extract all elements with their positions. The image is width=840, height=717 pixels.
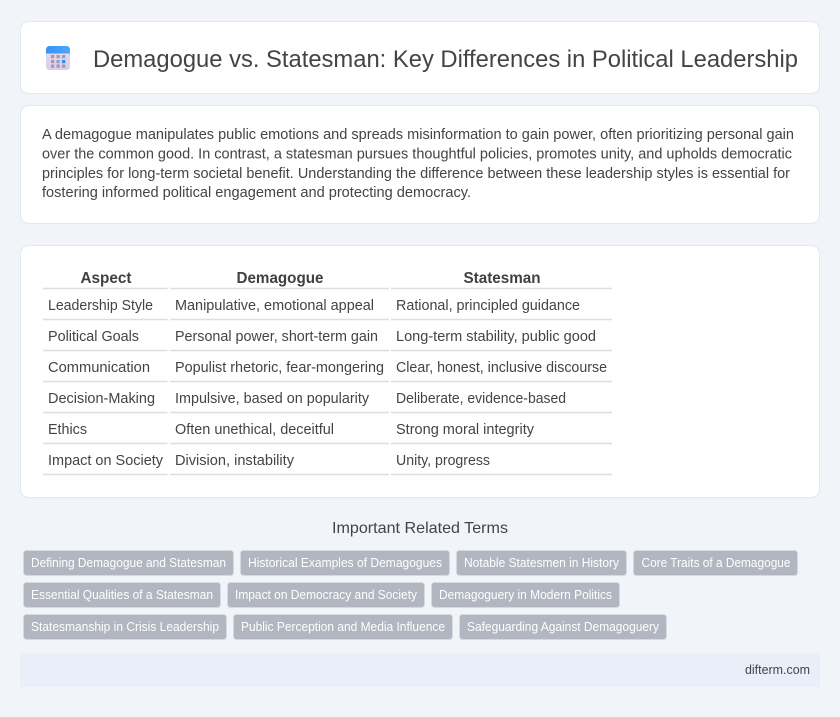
table row: Leadership Style: [48, 298, 580, 314]
table row: Impact on Society: Unity, progress: [396, 453, 490, 469]
table row: Communication: Communication: [48, 360, 150, 376]
text block: introduction paragraph: fostering informed political engagement and protecting democracy.: [42, 185, 471, 201]
tag: Demagoguery in Modern Politics: [439, 588, 612, 602]
table header: Statesman: [464, 270, 540, 287]
tag: [460, 614, 666, 640]
table row: Communication: [48, 360, 607, 376]
tag: [634, 550, 798, 576]
footer site name: difterm.com: [745, 662, 810, 677]
tag: [240, 550, 450, 576]
table row: Political Goals: Political Goals: [48, 329, 139, 345]
table row: Impact on Society: Division, instability: [175, 453, 295, 469]
table row: Communication: Populist rhetoric, fear-mongering: [175, 360, 384, 376]
table header: [80, 270, 540, 287]
table row: Decision-Making: Impulsive, based on popularity: [175, 391, 370, 407]
title: Demagogue vs. Statesman: Key Differences in Political Leadership: [93, 46, 798, 73]
tag: Notable Statesmen in History: [464, 556, 620, 570]
table row: Political Goals: [48, 329, 596, 345]
panel: comparison table: [20, 246, 820, 498]
heading: Important Related Terms: Important Related Terms: [332, 520, 508, 537]
header panel: [20, 22, 820, 94]
table row: Decision-Making: Decision-Making: [48, 391, 155, 407]
footer: [20, 653, 820, 687]
table row: Ethics: [48, 422, 535, 438]
tag: Impact on Democracy and Society: [235, 588, 418, 602]
tag: Core Traits of a Demagogue: [642, 556, 791, 570]
tag: Public Perception and Media Influence: [241, 620, 445, 634]
table row: Impact on Society: Impact on Society: [48, 453, 164, 469]
table row: Political Goals: Long-term stability, public good: [396, 329, 596, 345]
tag: [228, 582, 424, 608]
text block: introduction paragraph: principles for long-term societal benefit. Understanding the difference between these leadership styles is essential for: [42, 166, 790, 182]
tag: Statesmanship in Crisis Leadership: [31, 620, 219, 634]
tag: [24, 582, 220, 608]
icon: calendar: [46, 46, 70, 70]
table row: Leadership Style: Leadership Style: [48, 298, 153, 314]
tag: Defining Demagogue and Statesman: [31, 556, 226, 570]
related terms tags: [24, 550, 798, 640]
panel: introduction: [20, 106, 820, 224]
text block: introduction paragraph: A demagogue manipulates public emotions and spreads misinformation to gain power, often prioritizing personal gain: [42, 127, 794, 143]
table header: Demagogue: [236, 270, 324, 287]
text block: introduction paragraph: over the common good. In contrast, a statesman pursues thoughtful policies, promotes unity, and upholds democratic: [42, 146, 792, 162]
tag: [456, 550, 626, 576]
table row: Ethics: Often unethical, deceitful: [175, 422, 334, 438]
tag: [24, 550, 234, 576]
text block: introduction paragraph: [42, 127, 794, 201]
tag: [234, 614, 452, 640]
table row: Ethics: Ethics: [48, 422, 87, 438]
table header: Aspect: [80, 270, 132, 287]
table row: Leadership Style: Manipulative, emotional appeal: [175, 298, 374, 314]
table row: Decision-Making: [48, 391, 566, 407]
table row: Political Goals: Personal power, short-term gain: [175, 329, 378, 345]
table row: Ethics: Strong moral integrity: [396, 422, 535, 438]
tag: [432, 582, 620, 608]
tag: Essential Qualities of a Statesman: [31, 588, 213, 602]
table row: Impact on Society: [48, 453, 490, 469]
tag: [24, 614, 226, 640]
tag: Historical Examples of Demagogues: [248, 556, 442, 570]
table row: Decision-Making: Deliberate, evidence-based: [396, 391, 566, 407]
tag: Safeguarding Against Demagoguery: [467, 620, 660, 634]
table row: Communication: Clear, honest, inclusive discourse: [396, 360, 607, 376]
table row: Leadership Style: Rational, principled guidance: [396, 298, 580, 314]
